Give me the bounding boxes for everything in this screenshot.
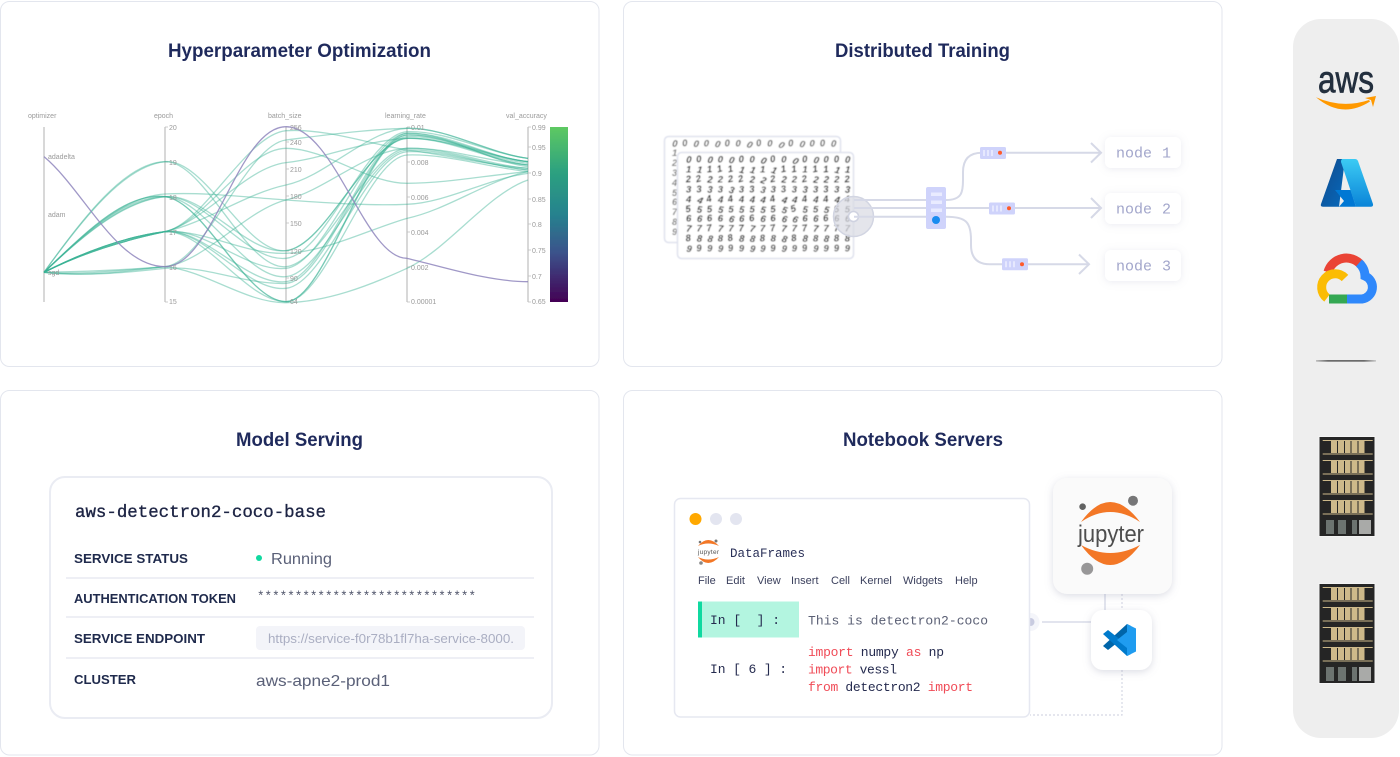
digit sheet: front: 1111111111111111 xyxy=(686,163,851,177)
menu bar: File xyxy=(698,575,716,587)
parallel coordinates chart: 210 xyxy=(290,167,302,174)
row: service status: Running xyxy=(271,551,332,568)
parallel coordinates chart: 0.00001 xyxy=(411,299,436,306)
menu bar xyxy=(698,575,978,587)
row: cluster: CLUSTER xyxy=(74,672,137,687)
row: service endpoint: SERVICE ENDPOINT xyxy=(74,631,205,646)
code cell: from detectron2 import xyxy=(808,680,973,695)
row: service status: SERVICE STATUS xyxy=(74,551,188,566)
parallel coordinates chart: 0.65 xyxy=(532,299,546,306)
active cell: In [ ] : xyxy=(710,613,780,628)
digit sheet: back: 0000000000000000 xyxy=(672,138,837,152)
menu bar: Edit xyxy=(726,575,745,587)
parallel coordinates chart: 0.004 xyxy=(411,230,429,237)
node 1: node xyxy=(1116,146,1152,162)
parallel coordinates chart: epoch xyxy=(154,113,173,120)
icon: chip 3 xyxy=(1002,258,1028,270)
digit sheet: front: 7777777777777777 xyxy=(686,223,851,235)
code cell: In [ 6 ] : xyxy=(710,662,787,677)
parallel coordinates chart: 64 xyxy=(290,299,298,306)
parallel coordinates chart: 0.006 xyxy=(411,195,429,202)
code cell xyxy=(710,645,973,695)
row dividers xyxy=(66,578,534,658)
connector lines xyxy=(854,153,1100,264)
node 2: 2 xyxy=(1162,202,1171,218)
digit sheet: back: 9 xyxy=(672,227,678,238)
row: service endpoint: https://service-f0r78b1fl7ha-service-8000. xyxy=(268,631,514,646)
parallel coordinates chart: 150 xyxy=(290,221,302,228)
code cell: import numpy as np xyxy=(808,645,944,660)
node 3 xyxy=(1105,250,1181,281)
icon: chip 1 xyxy=(980,147,1006,159)
parallel coordinates chart: 17 xyxy=(169,230,177,237)
row: service status xyxy=(74,551,332,568)
parallel coordinates chart: 240 xyxy=(290,140,302,147)
digit sheet: front xyxy=(678,152,854,258)
parallel coordinates chart xyxy=(28,113,568,306)
parallel coordinates chart: 0.002 xyxy=(411,265,429,272)
parallel coordinates chart: 0.99 xyxy=(532,125,546,132)
digit sheet: back: 1 xyxy=(672,148,677,159)
parallel coordinates chart: 0.95 xyxy=(532,145,546,152)
gpu rack 1 xyxy=(1319,436,1375,536)
parallel coordinates chart: 20 xyxy=(169,125,177,132)
digit sheet: back: 3 xyxy=(672,168,678,179)
row: service endpoint xyxy=(74,626,525,650)
panel: model serving xyxy=(0,390,599,755)
parallel coordinates chart: 19 xyxy=(169,160,177,167)
arrow heads xyxy=(1079,143,1101,274)
jupyter card xyxy=(1053,478,1172,594)
icon: central server xyxy=(926,187,946,229)
digit sheet: back: 5 xyxy=(672,188,678,199)
parallel coordinates chart: val_accuracy xyxy=(506,113,547,120)
digit sheet: back xyxy=(664,136,840,242)
notebook title: DataFrames xyxy=(730,547,805,561)
vs code card xyxy=(1091,610,1152,670)
digit sheet: front: 0000000000000000 xyxy=(686,154,851,168)
digit sheet: back: 8 xyxy=(672,217,678,228)
window dots xyxy=(690,513,742,525)
menu bar: Cell xyxy=(831,575,850,587)
icon: disk xyxy=(834,196,874,236)
node 1 xyxy=(1105,137,1181,168)
parallel coordinates chart: 0.85 xyxy=(532,197,546,204)
row: authentication token xyxy=(74,590,476,606)
logo: aws: aws xyxy=(1318,60,1374,102)
digit sheet: back: 4 xyxy=(671,178,678,189)
row: authentication token: AUTHENTICATION TOKEN xyxy=(74,591,236,606)
parallel coordinates chart: 0.7 xyxy=(532,274,542,281)
node 3: 3 xyxy=(1162,258,1171,276)
panel: hyperparameter optimization xyxy=(0,2,599,366)
heading: notebook servers: Notebook Servers xyxy=(843,430,1003,451)
parallel coordinates chart: adam xyxy=(48,212,66,219)
heading: distributed training: Distributed Training xyxy=(835,41,1010,62)
digit sheet: back: 2 xyxy=(671,158,678,169)
parallel coordinates chart: 16 xyxy=(169,265,177,272)
panel: distributed training xyxy=(624,2,1222,366)
digit sheet: front: 4444444444444444 xyxy=(685,193,851,207)
jupyter card: jupyter xyxy=(1077,521,1144,548)
parallel coordinates chart: learning_rate xyxy=(385,113,426,120)
parallel coordinates chart: 0.8 xyxy=(532,222,542,229)
icon: small jupyter xyxy=(697,540,720,565)
digit sheet: front: 6666666666666666 xyxy=(686,213,851,226)
parallel coordinates chart: 0.75 xyxy=(532,248,546,255)
icon: small jupyter: jupyter xyxy=(697,549,720,556)
gpu rack 2 xyxy=(1319,584,1375,684)
row: cluster xyxy=(74,672,390,690)
logo: google cloud xyxy=(1322,258,1372,299)
digit sheet: front: 9999999999999999 xyxy=(685,243,851,255)
menu bar: Kernel xyxy=(860,575,892,587)
digit sheet: front: 3333333333333333 xyxy=(686,184,851,197)
menu bar: View xyxy=(757,575,781,587)
parallel coordinates chart: 180 xyxy=(290,194,302,201)
service name: aws-detectron2-coco-base xyxy=(75,504,326,523)
parallel coordinates chart: sgd xyxy=(48,270,59,277)
digit sheet: back: 6 xyxy=(672,197,678,208)
digit sheet: front: 2222222222222222 xyxy=(684,173,851,187)
dotted connectors xyxy=(1022,594,1122,715)
row: cluster: aws-apne2-prod1 xyxy=(256,673,390,690)
parallel coordinates chart: 0.008 xyxy=(411,160,429,167)
parallel coordinates chart: adadelta xyxy=(48,154,75,161)
logo: azure xyxy=(1321,159,1373,207)
parallel coordinates chart: 18 xyxy=(169,195,177,202)
heading: model serving: Model Serving xyxy=(236,430,363,451)
logo: thin rule xyxy=(1316,360,1376,362)
digit sheet: front: 5555555555555555 xyxy=(685,203,851,217)
code cell: import vessl xyxy=(808,662,897,678)
menu bar: Widgets xyxy=(903,575,943,587)
node 2: node xyxy=(1116,202,1152,218)
node 2 xyxy=(1105,193,1181,224)
parallel coordinates chart: 120 xyxy=(290,249,302,256)
sidebar: infrastructure providers xyxy=(1293,19,1399,738)
row: authentication token: ***************************** xyxy=(257,590,476,604)
parallel coordinates chart: 0.9 xyxy=(532,171,542,178)
node 3: node xyxy=(1116,258,1152,276)
notebook window xyxy=(674,498,1030,717)
active cell: This is detectron2-coco xyxy=(808,614,988,628)
parallel coordinates chart: 256 xyxy=(290,125,302,132)
digit sheet: front: 8888888888888888 xyxy=(685,232,851,246)
panel: notebook servers xyxy=(624,390,1222,755)
parallel coordinates chart: 15 xyxy=(169,299,177,306)
digit sheet: back: 7 xyxy=(672,207,678,218)
node 1: 1 xyxy=(1162,146,1171,162)
parallel coordinates chart: 90 xyxy=(290,276,298,283)
parallel coordinates chart: batch_size xyxy=(268,113,302,120)
parallel coordinates chart: optimizer xyxy=(28,113,57,120)
active cell xyxy=(698,602,988,638)
menu bar: Insert xyxy=(791,575,819,587)
menu bar: Help xyxy=(955,575,978,587)
service card xyxy=(50,477,552,718)
parallel coordinates chart: 0.01 xyxy=(411,125,425,132)
heading: hyperparameter optimization: Hyperparameter Optimization xyxy=(168,41,431,62)
icon: chip 2 xyxy=(989,202,1015,214)
